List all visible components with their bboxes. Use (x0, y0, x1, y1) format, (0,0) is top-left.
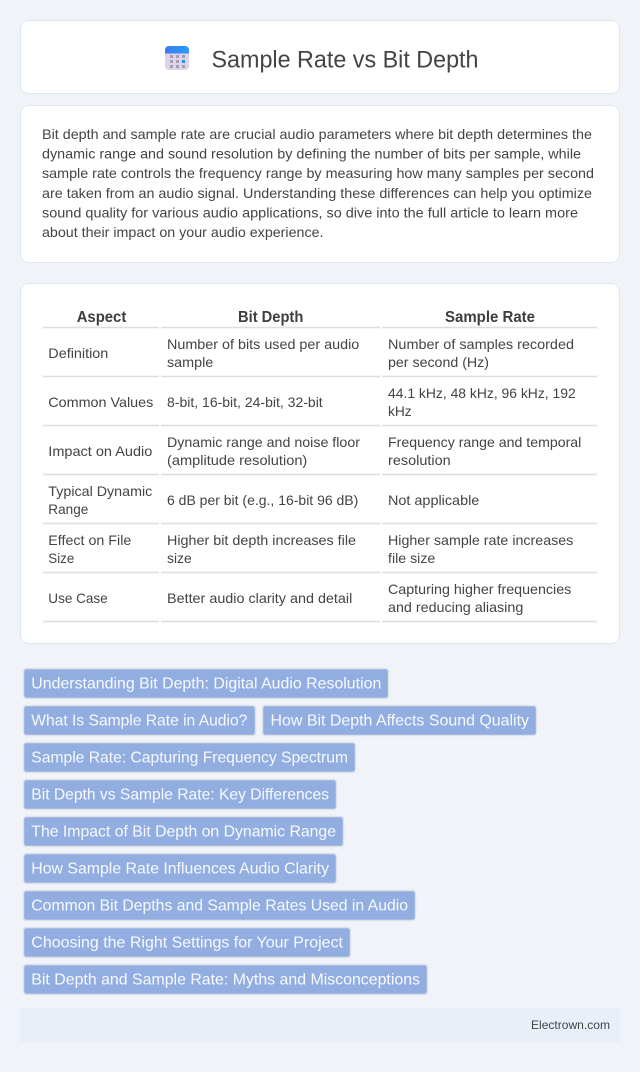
row: Definition: per second (Hz) (388, 354, 489, 370)
tag: Choosing the Right Settings (24, 928, 350, 958)
row: Common Values: 8-bit, 16-bit, 24-bit, 32-bit (167, 394, 323, 410)
row: Effect on File Size: size (167, 550, 192, 566)
tag: Impact of Bit Depth on Dynamic Range: The Impact of Bit Depth on Dynamic Range (31, 824, 336, 841)
table header row: Bit Depth (238, 309, 303, 326)
tag: Common Bit Depths and Sample Rates: Common Bit Depths and Sample Rates Used in Audio (31, 898, 408, 915)
row: Common Values: 44.1 kHz, 48 kHz, 96 kHz, 192 (388, 385, 576, 401)
row: Typical Dynamic Range: 6 dB per bit (e.g., 16-bit 96 dB) (167, 492, 358, 508)
row: Effect on File Size: file size (388, 550, 436, 566)
table header row: Sample Rate (445, 309, 535, 326)
row: Common Values (48, 385, 576, 419)
tag: Choosing the Right Settings: Choosing the Right Settings for Your Project (31, 935, 344, 952)
panel: related topic tags (24, 668, 536, 994)
row: Effect on File Size (48, 532, 573, 566)
tag: Understanding Bit Depth (24, 668, 388, 698)
table header row: Aspect (77, 309, 127, 326)
panel: introduction (20, 106, 620, 262)
row: Use Case: and reducing aliasing (388, 599, 523, 615)
tag: Sample Rate Capturing Frequency Spectrum (24, 742, 356, 772)
row: Common Values: Common Values (48, 394, 153, 410)
tag: What Is Sample Rate (24, 706, 256, 736)
row: Effect on File Size: Higher sample rate increases (388, 532, 573, 548)
row: Typical Dynamic Range: Typical Dynamic (48, 483, 152, 499)
row: Definition: sample (167, 354, 214, 370)
panel: header (20, 20, 620, 94)
intro paragraph: sound quality for various audio applications, so dive into the full article to learn more (42, 204, 578, 220)
row: Definition: Number of samples recorded (388, 336, 574, 352)
tag: Common Bit Depths and Sample Rates (24, 890, 416, 920)
row: Effect on File Size: Effect on File (48, 532, 132, 548)
row: Impact on Audio: resolution (388, 452, 451, 468)
icon: calendar grid (165, 46, 189, 70)
tag: Bit Depth vs Sample Rate (24, 780, 336, 810)
tag: Sample Rate Capturing Frequency Spectrum: Sample Rate: Capturing Frequency Spectrum (31, 750, 348, 767)
intro paragraph: Bit depth and sample rate are crucial audio parameters where bit depth determines the (42, 126, 592, 142)
row: Impact on Audio: Frequency range and temporal (388, 434, 581, 450)
row: Use Case (48, 581, 571, 615)
intro paragraph: sample rate controls the frequency range by measuring how many samples per second (42, 165, 594, 181)
row: Use Case: Capturing higher frequencies (388, 581, 571, 597)
tag: Impact of Bit Depth on Dynamic Range (24, 816, 344, 846)
tag: How Sample Rate Influences Audio Clarity (24, 854, 336, 884)
row: Typical Dynamic Range (48, 483, 480, 517)
tag: How Bit Depth Affects Sound Quality (262, 706, 536, 736)
tag: What Is Sample Rate: What Is Sample Rate in Audio? (31, 713, 247, 730)
tag: Understanding Bit Depth: Understanding Bit Depth: Digital Audio Resolution (31, 676, 381, 693)
intro paragraph (42, 126, 594, 240)
row: Use Case: Use Case (48, 590, 108, 606)
tag: How Sample Rate Influences Audio Clarity: How Sample Rate Influences Audio Clarity (31, 861, 329, 878)
row: Definition: Number of bits used per audio (167, 336, 360, 352)
row: Effect on File Size: Higher bit depth increases file (167, 532, 356, 548)
footer: Electrown.com (531, 1018, 610, 1032)
panel: comparison table (20, 284, 620, 644)
tag: Myths and Misconceptions (24, 964, 428, 994)
tag: Myths and Misconceptions: Bit Depth and Sample Rate: Myths and Misconceptions (31, 972, 420, 989)
table header row (77, 309, 535, 326)
footer (20, 1008, 620, 1042)
row: Typical Dynamic Range: Not applicable (388, 492, 480, 508)
intro paragraph: about their impact on your audio experience. (42, 224, 324, 240)
row: Definition: Definition (48, 345, 108, 361)
intro paragraph: dynamic range and sound resolution by defining the number of bits per sample, while (42, 146, 581, 162)
intro paragraph: are taken from an audio signal. Understanding these differences can help you optimize (42, 185, 592, 201)
row: Impact on Audio: Impact on Audio (48, 443, 153, 459)
row: Effect on File Size: Size (48, 550, 75, 566)
row: Definition (48, 336, 574, 370)
title: Sample Rate vs Bit Depth (212, 46, 478, 74)
tag: Bit Depth vs Sample Rate: Bit Depth vs Sample Rate: Key Differences (31, 787, 329, 804)
row: Use Case: Better audio clarity and detail (167, 590, 352, 606)
row: Impact on Audio: Dynamic range and noise floor (167, 434, 360, 450)
tag: How Bit Depth Affects Sound Quality: How Bit Depth Affects Sound Quality (270, 713, 529, 730)
row: Impact on Audio (48, 434, 581, 468)
row: Impact on Audio: (amplitude resolution) (167, 452, 307, 468)
row: Common Values: kHz (388, 403, 412, 419)
row: Typical Dynamic Range: Range (48, 501, 88, 517)
